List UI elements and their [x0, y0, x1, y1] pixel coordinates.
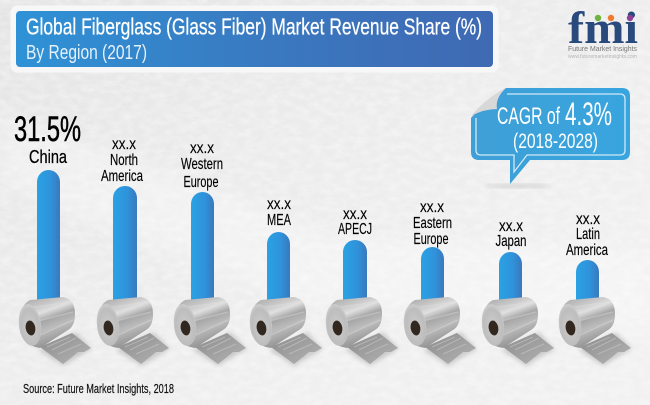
bar: Western Europe — [171, 140, 247, 366]
label: Western Europe: Western — [181, 156, 223, 173]
callout: CAGR: 4.3% — [565, 96, 612, 132]
label: China: China — [29, 147, 68, 167]
logo: Future Market Insights: Future Market Insights — [568, 44, 637, 53]
label: China — [14, 110, 81, 167]
bar: MEA — [247, 196, 323, 366]
label: Western Europe — [181, 140, 223, 191]
label: Western Europe: Europe — [184, 174, 219, 191]
label: Western Europe: xx.x — [190, 140, 214, 157]
bar: Eastern Europe — [401, 199, 477, 366]
label: Eastern Europe: Eastern — [413, 215, 452, 232]
label: Eastern Europe: xx.x — [420, 199, 444, 216]
label: Latin America: Latin — [576, 226, 600, 243]
label: APECJ: APECJ — [338, 221, 372, 238]
label: Japan: xx.x — [499, 218, 523, 235]
title line 1: Global Fiberglass (Glass Fiber) Market Revenue Share (%) — [26, 14, 482, 40]
bar: Japan — [479, 218, 555, 366]
title banner — [10, 6, 498, 72]
label: APECJ: xx.x — [343, 206, 367, 223]
logo: Future Market Insights: www.futuremarketinsights.com — [567, 54, 637, 60]
callout: CAGR — [471, 88, 630, 188]
label: China: 31.5% — [14, 110, 81, 149]
label: APECJ — [338, 206, 372, 238]
label: North America: xx.x — [112, 136, 136, 153]
label: North America: America — [101, 168, 143, 185]
label: MEA — [267, 196, 291, 229]
label: Latin America: xx.x — [576, 211, 600, 228]
logo: Future Market Insights: fmi — [568, 2, 638, 53]
label: MEA: xx.x — [267, 196, 291, 213]
label: Eastern Europe: Europe — [414, 231, 449, 248]
title line 2: By Region (2017) — [26, 42, 147, 64]
label: Latin America — [566, 211, 608, 259]
callout text: CAGR of — [497, 103, 560, 130]
bar: Latin America — [556, 211, 632, 366]
label: Japan: Japan — [496, 233, 526, 250]
callout: CAGR: (2018-2028) — [513, 130, 598, 153]
source note: Source: Future Market Insights, 2018 — [23, 381, 174, 396]
label: Japan — [496, 218, 526, 250]
label: MEA: MEA — [267, 212, 291, 229]
label: North America — [101, 136, 143, 185]
bar: North America — [94, 136, 170, 366]
label: Latin America: America — [566, 242, 608, 259]
label: North America: North — [110, 152, 138, 169]
bar: APECJ — [323, 206, 399, 366]
bar: China — [14, 110, 92, 366]
label: Eastern Europe — [413, 199, 452, 248]
